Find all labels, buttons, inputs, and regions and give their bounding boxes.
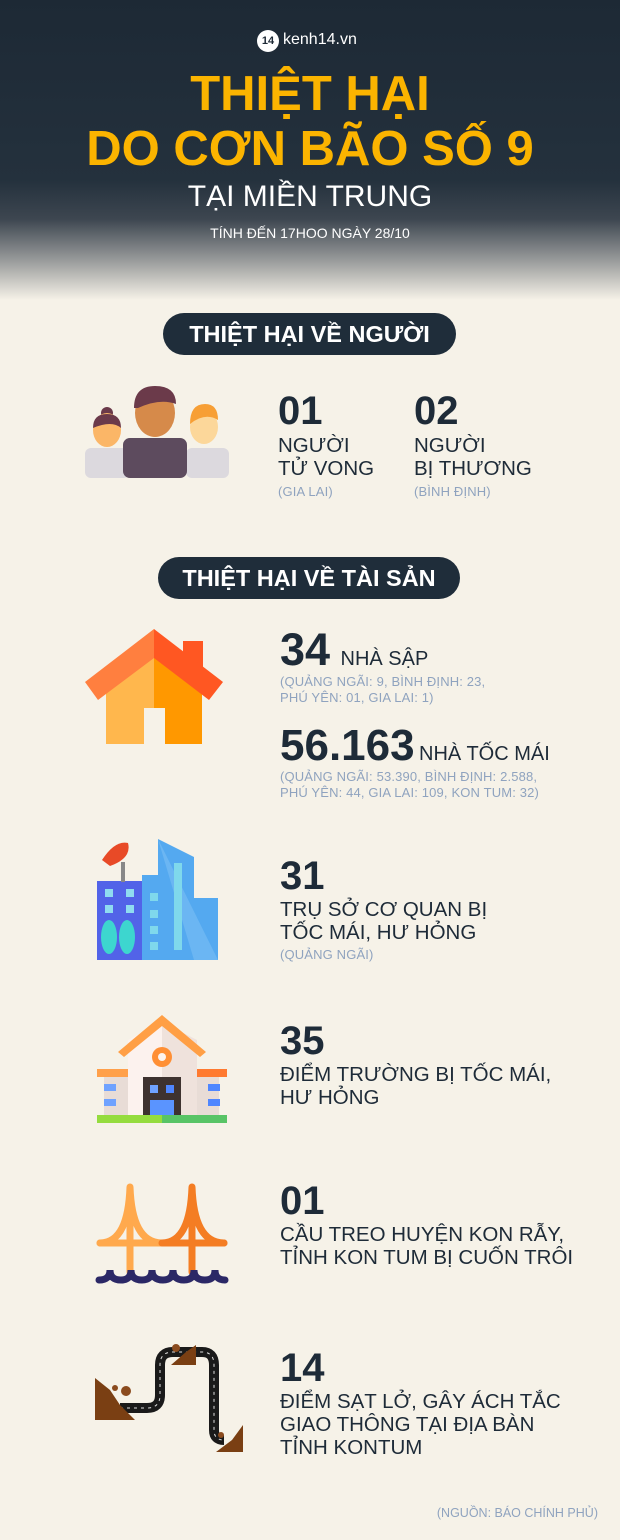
stat: offices: TRỤ SỞ CƠ QUAN BỊ bbox=[280, 898, 487, 921]
stat: landslides: GIAO THÔNG TẠI ĐỊA BÀN bbox=[280, 1413, 534, 1436]
stat: landslides: TỈNH KONTUM bbox=[280, 1436, 422, 1459]
stat: offices: 31 bbox=[280, 854, 324, 898]
stat: deaths bbox=[278, 389, 374, 499]
heading: property bbox=[158, 557, 460, 599]
title: DO CƠN BÃO SỐ 9 bbox=[86, 122, 534, 176]
icon: logo badge bbox=[257, 30, 279, 52]
stat: bridge: TỈNH KON TUM BỊ CUỐN TRÔI bbox=[280, 1246, 573, 1269]
heading: people bbox=[163, 313, 456, 355]
stat: offices: TỐC MÁI, HƯ HỎNG bbox=[280, 921, 476, 944]
stat: collapsed houses: PHÚ YÊN: 01, GIA LAI: 1) bbox=[280, 690, 434, 705]
logo bbox=[257, 30, 357, 52]
heading: people: THIỆT HẠI VỀ NGƯỜI bbox=[189, 321, 430, 347]
stat: landslides: 14 bbox=[280, 1346, 324, 1390]
date note: TÍNH ĐẾN 17HOO NGÀY 28/10 bbox=[210, 225, 410, 241]
stat: roof damage: (QUẢNG NGÃI: 53.390, BÌNH ĐỊNH: 2.588, bbox=[280, 769, 537, 784]
stat: collapsed houses bbox=[280, 624, 485, 705]
stat: deaths: NGƯỜI bbox=[278, 434, 350, 457]
stat: schools: HƯ HỎNG bbox=[280, 1086, 380, 1109]
logo text: kenh14.vn bbox=[283, 31, 357, 48]
stat: schools bbox=[280, 1019, 551, 1109]
stat: roof damage: PHÚ YÊN: 44, GIA LAI: 109, KON TUM: 32) bbox=[280, 785, 539, 800]
stat: bridge bbox=[280, 1179, 573, 1269]
stat: deaths: TỬ VONG bbox=[278, 457, 374, 480]
stat: injured: (BÌNH ĐỊNH) bbox=[414, 484, 491, 499]
stat: landslides bbox=[280, 1346, 561, 1459]
stat: offices: (QUẢNG NGÃI) bbox=[280, 947, 374, 962]
stat: roof damage: 56.163 NHÀ TỐC MÁI bbox=[280, 721, 550, 770]
stat: offices bbox=[280, 854, 487, 962]
stat: schools: ĐIỂM TRƯỜNG BỊ TỐC MÁI, bbox=[280, 1063, 551, 1086]
heading: property: THIỆT HẠI VỀ TÀI SẢN bbox=[182, 565, 436, 591]
stat: deaths: (GIA LAI) bbox=[278, 484, 333, 499]
stat: bridge: CẦU TREO HUYỆN KON RẪY, bbox=[280, 1223, 564, 1246]
stat: injured: 02 bbox=[414, 389, 458, 433]
source note: (NGUỒN: BÁO CHÍNH PHỦ) bbox=[437, 1506, 598, 1520]
title: THIỆT HẠI bbox=[190, 67, 430, 121]
stat: injured: BỊ THƯƠNG bbox=[414, 457, 532, 480]
stat: collapsed houses: 34 NHÀ SẬP bbox=[280, 624, 428, 675]
stat: collapsed houses: (QUẢNG NGÃI: 9, BÌNH ĐỊNH: 23, bbox=[280, 674, 485, 689]
stat: roof damage bbox=[280, 721, 550, 800]
stat: deaths: 01 bbox=[278, 389, 322, 433]
header background bbox=[0, 0, 620, 300]
stat: bridge: 01 bbox=[280, 1179, 324, 1223]
title bbox=[86, 66, 534, 176]
stat: landslides: ĐIỂM SẠT LỞ, GÂY ÁCH TẮC bbox=[280, 1390, 561, 1413]
subtitle: TẠI MIỀN TRUNG bbox=[188, 180, 432, 213]
stat: injured: NGƯỜI bbox=[414, 434, 486, 457]
stat: schools: 35 bbox=[280, 1019, 324, 1063]
icon: logo badge: 14 bbox=[262, 35, 274, 47]
stat: injured bbox=[414, 389, 532, 499]
